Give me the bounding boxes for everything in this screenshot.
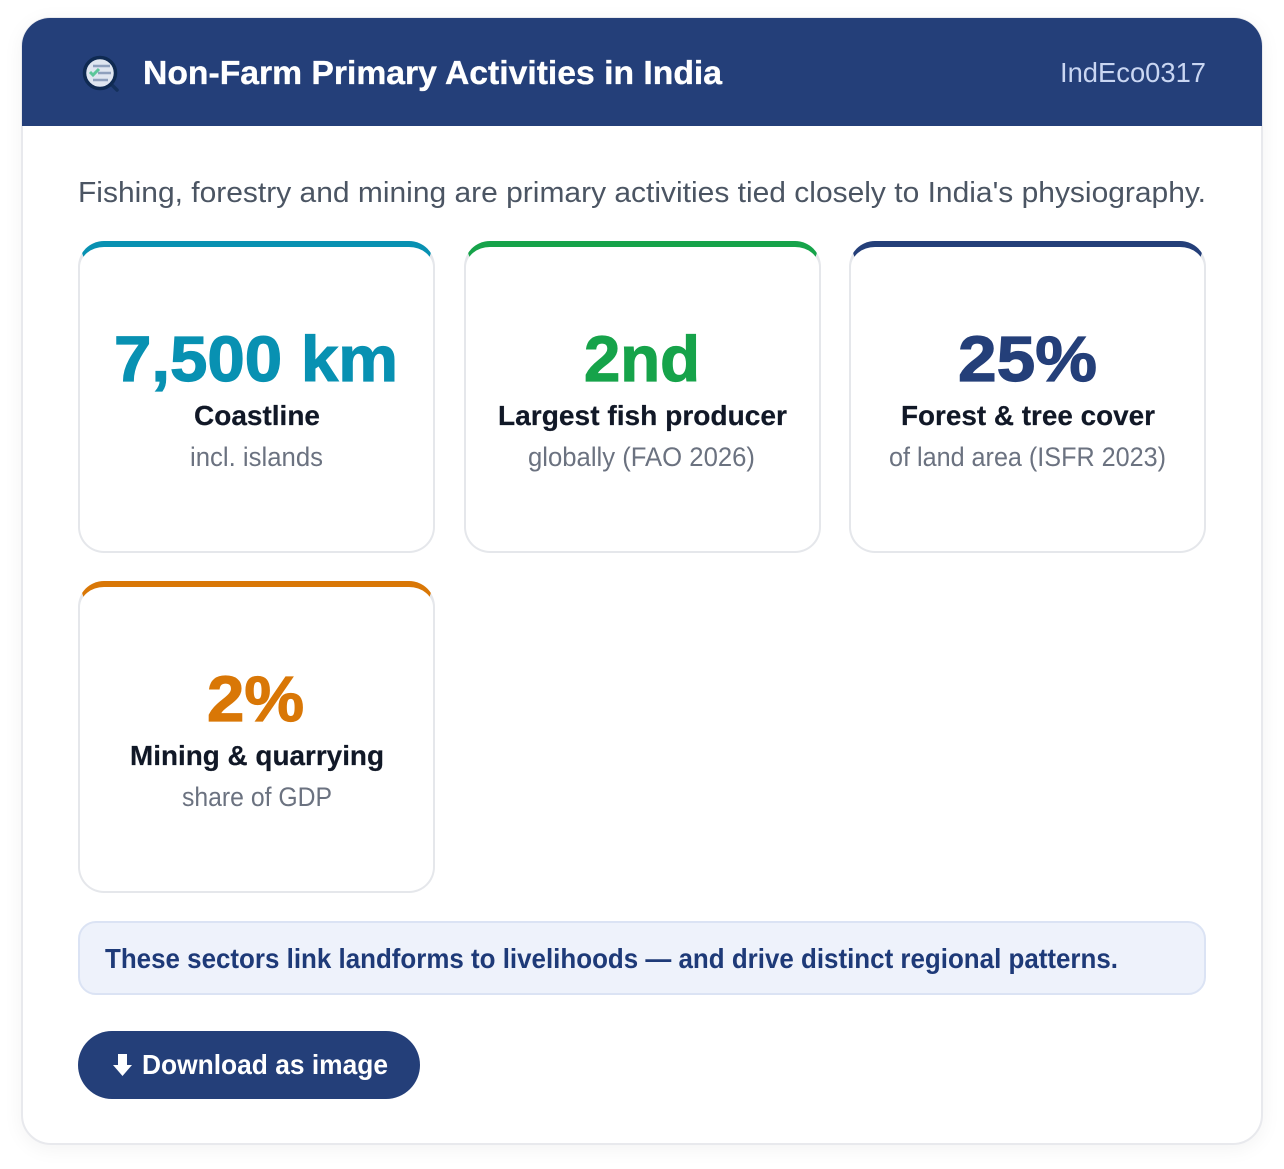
icon: down arrow	[113, 1054, 132, 1076]
panel: mining stat	[78, 581, 435, 893]
icon: checklist magnifier logo	[84, 58, 117, 90]
panel: forest cover stat	[849, 241, 1206, 553]
stat label: Forest & tree cover	[901, 400, 1155, 431]
subtitle text: Fishing, forestry and mining are primary activities tied closely to India's physiography.	[78, 177, 1206, 209]
download button	[78, 1031, 420, 1099]
panel: header bar	[22, 18, 1262, 126]
stat note: incl. islands	[190, 442, 323, 472]
topic code: IndEco0317	[1060, 57, 1206, 88]
callout: These sectors link landforms to livelihoods — and drive distinct regional patterns.	[105, 943, 1118, 974]
stat label: Mining & quarrying	[130, 740, 384, 771]
stat note: globally (FAO 2026)	[528, 442, 755, 472]
stat label: Largest fish producer	[498, 400, 787, 431]
stat label: Coastline	[194, 400, 320, 431]
callout	[78, 921, 1206, 995]
panel: coastline stat	[78, 241, 435, 553]
stat value: 2%	[207, 663, 304, 735]
stat note: of land area (ISFR 2023)	[889, 442, 1166, 472]
panel: fish producer stat	[464, 241, 821, 553]
stat note: share of GDP	[182, 782, 332, 812]
stat value: 2nd	[584, 323, 700, 395]
stat value: 7,500 km	[114, 323, 398, 395]
button label: Download as image	[142, 1049, 388, 1080]
stat value: 25%	[958, 323, 1097, 395]
title: Non-Farm Primary Activities in India	[143, 55, 722, 92]
